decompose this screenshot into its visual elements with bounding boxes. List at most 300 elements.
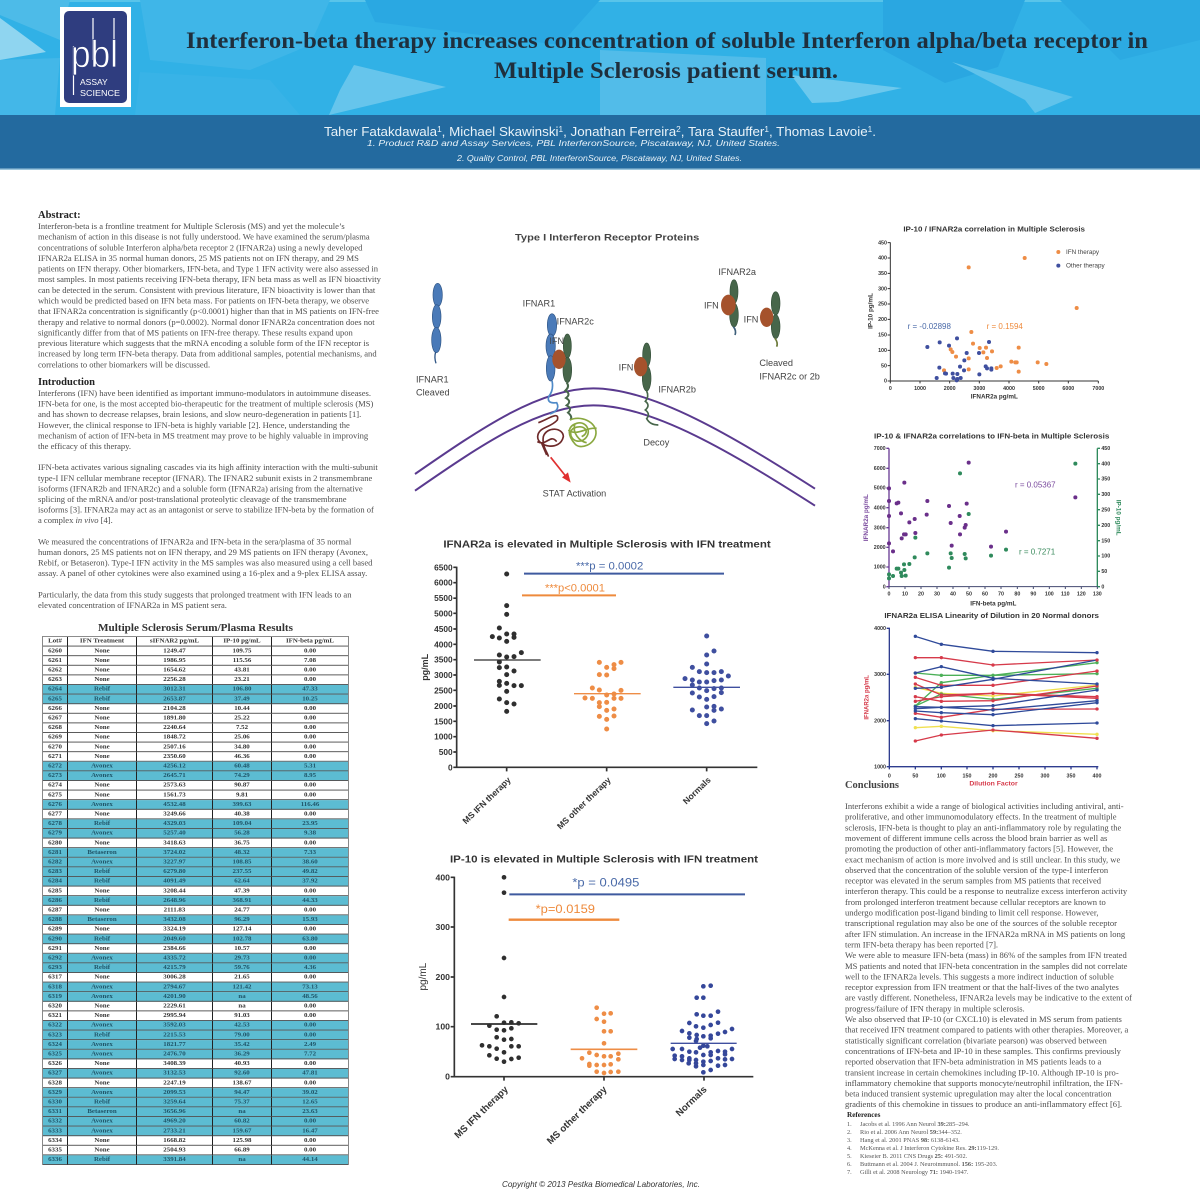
- results table: 8.95: [304, 772, 316, 779]
- references: 2.: [847, 1129, 852, 1136]
- results table: 6281: [48, 849, 62, 856]
- results table: 2111.83: [164, 906, 185, 913]
- results table: 6332: [48, 1118, 62, 1124]
- conclusions: undergo modification post-ligand binding to limit cell response. However,: [845, 908, 1098, 918]
- chart: correlations to IFN-beta scatter: IP-10 pg/mL: [1115, 500, 1122, 536]
- dots: IFNAR2a: [889, 463, 1075, 551]
- results table: 138.67: [233, 1079, 251, 1086]
- results table: 0.00: [304, 1079, 316, 1086]
- authors and affiliations: .: [872, 124, 876, 139]
- conclusions: promoting the production of other anti-inflammatory factors [5]. However, the: [845, 844, 1113, 854]
- results table: 3249.66: [163, 810, 186, 817]
- results table: na: [238, 1002, 246, 1009]
- results table: 1821.77: [163, 1041, 186, 1048]
- results table: 6320: [48, 1002, 62, 1009]
- results table: None: [94, 945, 110, 952]
- results table: Betaseron: [87, 916, 117, 923]
- results table: 3259.64: [163, 1098, 186, 1105]
- introduction: Rebif, or Betaseron). Type-I IFN activity in the MS samples was also measured using a cell based: [38, 558, 373, 568]
- results table: None: [94, 782, 110, 788]
- abstract: most samples. In most patients receiving IFN-beta therapy, IFN beta mass as well as IFN bioactivity: [38, 274, 382, 284]
- results table: 23.95: [302, 820, 318, 827]
- results table: 6267: [48, 714, 62, 721]
- results table: 6270: [48, 743, 62, 750]
- chart: correlations to IFN-beta scatter: 7000: [874, 446, 886, 452]
- abstract: [38, 210, 382, 369]
- results table: 6286: [48, 897, 62, 904]
- results table: 16.47: [302, 1127, 318, 1134]
- results table: 5.31: [304, 762, 316, 769]
- chart: correlations to IFN-beta scatter: 0: [1101, 584, 1104, 590]
- results table: Avonex: [91, 830, 113, 836]
- results table: 6277: [48, 810, 62, 817]
- results table: 6284: [48, 878, 62, 884]
- results table: 6326: [48, 1060, 62, 1067]
- title: Interferon-beta therapy increases concentration of soluble Interferon alpha/beta receptor in: [186, 28, 1148, 54]
- results table: 7.33: [304, 849, 316, 856]
- diagram labels: Cleaved: [416, 388, 450, 398]
- conclusions: term IFN-beta therapy has been reported [7].: [845, 939, 998, 949]
- references: Gilli et al. 2008 Neurology 71: 1940-1947.: [860, 1169, 969, 1176]
- abstract: previous literature which suggests that the mRNA encoding a soluble form of the IFN receptor is: [38, 338, 370, 348]
- results table: 108.85: [233, 858, 251, 865]
- conclusions: transcriptional regulation may also be one of the sources of the soluble receptor: [845, 918, 1117, 928]
- correlation labels: [908, 322, 1023, 331]
- logo: [60, 7, 131, 107]
- results table: None: [94, 906, 110, 913]
- chart: correlations to IFN-beta scatter: 250: [1101, 507, 1110, 513]
- introduction: human donors, 25 MS patients not on IFN therapy, and 29 MS patients on IFN therapy (Avonex,: [38, 547, 368, 557]
- results table: IP-10 pg/mL: [223, 638, 261, 644]
- chart: correlations to IFN-beta scatter: 110: [1061, 592, 1070, 598]
- chart: IP-10 dot plot: pg/mL: [418, 962, 429, 991]
- conclusions: transient increase in certain chemokines including IP-10. Although IP-10 is pro-: [845, 1067, 1119, 1077]
- results table: 6276: [48, 801, 62, 808]
- conclusions: observed that the concentration of the soluble version of the type-I interferon: [845, 865, 1109, 875]
- results table: 4.36: [304, 964, 316, 971]
- results table: 3408.39: [163, 1060, 186, 1067]
- results table: 2240.64: [163, 724, 186, 731]
- introduction: isoforms (IFNAR2b and IFNAR2c) and a soluble form (IFNAR2a) arising from the alternative: [38, 483, 363, 493]
- references: 3.: [847, 1137, 852, 1144]
- results table: 94.47: [234, 1089, 250, 1096]
- results table: 2104.28: [163, 705, 186, 712]
- chart: linearity of dilution: 2000: [874, 718, 886, 724]
- results table: 0.00: [304, 839, 316, 846]
- diagram labels: IFNAR2a: [718, 267, 757, 277]
- chart: IP-10 dot plot: 0: [445, 1072, 450, 1082]
- results table: 116.46: [301, 801, 319, 808]
- results table: 6269: [48, 734, 62, 740]
- results table: 37.49: [234, 695, 250, 702]
- chart: IFNAR2a dot plot: 4000: [434, 639, 453, 649]
- significance: p = 0.0002: ***p = 0.0002: [576, 560, 643, 572]
- results table: None: [94, 724, 110, 731]
- results table: 2229.61: [163, 1002, 186, 1009]
- results table: 73.13: [302, 983, 318, 990]
- results table: Avonex: [91, 762, 113, 769]
- dots: MS other therapy: [585, 662, 621, 729]
- authors and affiliations: , Tara Stauffer: [681, 124, 765, 139]
- chart: IP-10 dot plot: [418, 854, 759, 1147]
- results table: 36.29: [234, 1050, 250, 1057]
- results table: None: [94, 734, 110, 740]
- results table: None: [94, 705, 110, 712]
- results table: 10.57: [234, 945, 250, 952]
- significance: p=0.0159: *p=0.0159: [536, 903, 595, 916]
- results table: None: [94, 666, 110, 673]
- chart: IP-10 dot plot: IP-10 is elevated in Multiple Sclerosis with IFN treatment: [450, 854, 759, 865]
- results table: 0.00: [304, 1031, 316, 1038]
- results table: 109.75: [233, 647, 251, 654]
- chart: IFNAR2a dot plot: 5500: [434, 593, 453, 603]
- results table: None: [94, 1079, 110, 1086]
- abstract: correlations to other biomarkers will be discussed.: [38, 359, 210, 369]
- results table: 6319: [48, 993, 62, 1000]
- results table: 0.00: [304, 1060, 316, 1067]
- chart: IP-10 dot plot: MS other therapy: [545, 1084, 610, 1147]
- results table: 0.00: [304, 1022, 316, 1028]
- correlation labels: r = 0.7271: [1019, 547, 1056, 556]
- conclusions: beta induced transient systemic upregulation may alter the local concentration: [845, 1089, 1112, 1099]
- results table: None: [94, 1137, 110, 1144]
- results table: 66.89: [234, 1146, 250, 1153]
- conclusions: Interferons exhibit a wide a range of biological activities including antiviral, anti-: [845, 801, 1124, 811]
- introduction: IFN-beta activates various signaling cascades via its high affinity interaction with the multi-subunit: [38, 462, 378, 472]
- references: Buttmann et al. 2004 J. Neuroimmunol. 156: 195-203.: [860, 1161, 998, 1168]
- chart: IFNAR2a dot plot: 3000: [434, 670, 453, 680]
- results table: 6328: [48, 1079, 62, 1086]
- results table: 4091.49: [163, 878, 186, 884]
- results table: 3132.53: [163, 1070, 186, 1076]
- results table: 109.04: [233, 820, 251, 827]
- chart: IP-10 IFNAR2a correlation scatter: 0: [884, 379, 887, 385]
- conclusions: well to the IFNAR2a levels. This suggests a more indirect induction of soluble: [845, 971, 1114, 981]
- chart: correlations to IFN-beta scatter: [863, 431, 1122, 608]
- results table: 25.22: [234, 714, 250, 721]
- copyright: Copyright © 2013 Pestka Biomedical Laboratories, Inc.: [502, 1179, 700, 1189]
- chart: IP-10 IFNAR2a correlation scatter: 450: [878, 240, 887, 246]
- results table: Rebif: [94, 868, 110, 875]
- chart: IP-10 dot plot: 400: [436, 872, 450, 882]
- results table: None: [94, 810, 110, 817]
- results table: 6260: [48, 647, 62, 654]
- chart: IP-10 IFNAR2a correlation scatter: [868, 227, 1106, 401]
- chart: IP-10 IFNAR2a correlation scatter: IFNAR2a pg/mL: [971, 394, 1018, 401]
- introduction: elevated concentration of IFNAR2a in MS patient sera.: [38, 600, 227, 610]
- results table: 23.21: [234, 676, 250, 683]
- results table: 0.00: [304, 791, 316, 798]
- results table: Avonex: [91, 1118, 113, 1124]
- references: Jacobs et al. 1996 Ann Neurol 39:285–294.: [860, 1121, 970, 1128]
- chart: correlations to IFN-beta scatter: 40: [950, 592, 956, 598]
- chart: linearity of dilution: IFNAR2a pg/mL: [864, 675, 870, 720]
- results table: 34.80: [234, 743, 250, 750]
- results table: 12.65: [302, 1098, 318, 1105]
- chart: correlations to IFN-beta scatter: 0: [888, 592, 891, 598]
- abstract: IFNAR2a ELISA in 35 normal human donors, 25 MS patients not on IFN therapy, and 29 MS: [38, 253, 359, 263]
- results table: None: [94, 714, 110, 721]
- results table: 3208.44: [163, 887, 186, 894]
- title: Multiple Sclerosis patient serum.: [494, 58, 838, 84]
- results table: 2653.87: [163, 695, 186, 702]
- chart: correlations to IFN-beta scatter: IP-10 & IFNAR2a correlations to IFN-beta in Multiple Sclerosis: [874, 431, 1109, 440]
- results table: None: [94, 753, 110, 760]
- references: [847, 1111, 999, 1176]
- abstract: Interferon-beta is a frontline treatment for Multiple Sclerosis (MS) and yet the molecule’s: [38, 221, 345, 231]
- logo: pbl: [71, 34, 118, 76]
- chart: correlations to IFN-beta scatter: 70: [998, 592, 1004, 598]
- chart: IP-10 IFNAR2a correlation scatter: 150: [878, 333, 887, 339]
- results table: 6283: [48, 868, 62, 875]
- results table: 0.00: [304, 676, 316, 683]
- abstract: Abstract:: [38, 210, 81, 221]
- results table: 91.03: [234, 1012, 250, 1019]
- lines: navy donors: [915, 636, 1097, 726]
- results table: 40.93: [234, 1060, 250, 1067]
- results table: 10.44: [234, 705, 250, 712]
- chart: linearity of dilution: 250: [1015, 774, 1023, 780]
- results table: 0.00: [304, 945, 316, 952]
- results table: 0.00: [304, 1146, 316, 1153]
- results table: Rebif: [94, 695, 110, 702]
- diagram labels: [416, 267, 820, 499]
- results table: None: [94, 791, 110, 798]
- results table: 7.52: [236, 724, 248, 731]
- significance: p = 0.0495: *p = 0.0495: [572, 877, 639, 890]
- results table: 9.38: [304, 830, 316, 836]
- results table: Avonex: [91, 983, 113, 990]
- results table: None: [94, 974, 110, 980]
- results table: 0.00: [304, 753, 316, 760]
- results table: 5257.40: [163, 830, 186, 836]
- results table: 0.00: [304, 1137, 316, 1144]
- references: 7.: [847, 1169, 852, 1176]
- references: 5.: [847, 1153, 852, 1160]
- results table: 1249.47: [163, 647, 186, 654]
- results table: 6282: [48, 858, 62, 865]
- results table: 7.08: [304, 657, 316, 664]
- abstract: can be detected in the serum. Consistent with previous literature, IFN bioactivity is lower than that: [38, 285, 376, 295]
- results table: 2099.53: [163, 1089, 186, 1096]
- abstract: increased by long term IFN-beta therapy. Data from additional samples, potential mechanisms, and: [38, 349, 377, 359]
- results table: 29.73: [234, 954, 250, 961]
- correlation labels: [1015, 481, 1056, 556]
- results table: na: [238, 1156, 246, 1163]
- results table: 1654.62: [163, 666, 186, 673]
- results table: 6321: [48, 1012, 62, 1019]
- results table: 0.00: [304, 1012, 316, 1019]
- results table: 6330: [48, 1098, 62, 1105]
- results table: 1561.73: [163, 791, 186, 798]
- results table: 399.63: [233, 801, 251, 808]
- chart: correlations to IFN-beta scatter: 4000: [874, 505, 886, 511]
- results table: Betaseron: [87, 1108, 117, 1115]
- receptor: cleaved IFNAR2c or 2b: [760, 292, 780, 347]
- chart: correlations to IFN-beta scatter: 60: [982, 592, 988, 598]
- chart: correlations to IFN-beta scatter: 100: [1101, 554, 1110, 560]
- results table: 3656.96: [163, 1108, 186, 1115]
- results table: 1848.72: [163, 734, 186, 740]
- results table: 25.06: [234, 734, 250, 740]
- results table: 6262: [48, 666, 62, 673]
- results table: 2256.28: [163, 676, 186, 683]
- results table: 2247.19: [163, 1079, 186, 1086]
- authors and affiliations: [324, 124, 876, 163]
- conclusions: MS patients and noted that IFN-beta concentration in the samples did not correlate: [845, 961, 1128, 971]
- chart: correlations to IFN-beta scatter: 120: [1077, 592, 1086, 598]
- results table: 6331: [48, 1108, 62, 1115]
- header banner: [0, 0, 1200, 170]
- results table: 24.77: [234, 906, 250, 913]
- results table: 74.29: [234, 772, 250, 779]
- introduction: Introduction: [38, 377, 95, 388]
- results table: 0.00: [304, 810, 316, 817]
- chart: IP-10 IFNAR2a correlation scatter: 5000: [1033, 386, 1045, 392]
- results table: 9.81: [236, 791, 248, 798]
- results table: 3391.84: [163, 1156, 186, 1163]
- results table: None: [94, 926, 110, 932]
- chart: correlations to IFN-beta scatter: 200: [1101, 523, 1110, 529]
- references: Rio et al. 2006 Ann Neurol 59:344–352.: [860, 1129, 962, 1136]
- results table: 2794.67: [163, 983, 186, 990]
- results table: 2476.70: [163, 1050, 186, 1057]
- logo: SCIENCE: [80, 88, 120, 98]
- chart: correlations to IFN-beta scatter: 10: [902, 592, 908, 598]
- results table: 6322: [48, 1022, 62, 1028]
- results table: 49.82: [302, 868, 318, 875]
- references: Kieseier B. 2011 CNS Drugs 25: 491-502.: [860, 1153, 968, 1160]
- conclusions: interferon therapy. This could be a response to neutralize excess interferon activity: [845, 886, 1128, 896]
- authors and affiliations: 2: [676, 125, 681, 134]
- results table: IFN Treatment: [80, 638, 124, 644]
- results table: IFN-beta pg/mL: [286, 638, 334, 644]
- authors and affiliations: 1: [437, 125, 442, 134]
- results table: None: [94, 1146, 110, 1153]
- results table: None: [94, 657, 110, 664]
- results table: 6292: [48, 954, 62, 961]
- significance: p<0.0001: [522, 582, 616, 595]
- results table: 6275: [48, 791, 62, 798]
- results table: 40.38: [234, 810, 250, 817]
- results table: 6317: [48, 974, 62, 980]
- lines: green donors: [915, 663, 1097, 706]
- results table: 106.80: [233, 686, 251, 692]
- conclusions: are vastly different. Nonetheless, IFNAR2a levels may be indicative to the extent of: [845, 993, 1132, 1003]
- chart: IP-10 IFNAR2a correlation scatter: 1000: [914, 386, 926, 392]
- abstract: significantly differ from that of MS patients on IFN-free therapy. These results expand upon: [38, 327, 354, 337]
- conclusions: concentrations of IFN-beta and IP-10 in these samples. This confirms previously: [845, 1046, 1122, 1056]
- results table: 2648.96: [163, 897, 186, 904]
- diagram labels: IFNAR2c: [557, 317, 594, 327]
- results table: 6329: [48, 1089, 62, 1096]
- chart: linearity of dilution: 3000: [874, 672, 886, 678]
- legend: Other therapy: [1066, 263, 1106, 270]
- abstract: patients on IFN therapy. Other biomarkers, IFN-beta, and Type 1 IFN activity were also assessed in: [38, 264, 379, 274]
- dots: Normals: [673, 986, 732, 1072]
- chart: correlations to IFN-beta scatter: 100: [1045, 592, 1054, 598]
- chart: IP-10 IFNAR2a correlation scatter: 350: [878, 271, 887, 277]
- results table: 0.00: [304, 954, 316, 961]
- chart: IP-10 dot plot: 200: [436, 972, 450, 982]
- receptor: decoy IFNAR2b: [634, 343, 658, 425]
- results table: 6288: [48, 916, 62, 923]
- chart: correlations to IFN-beta scatter: 400: [1101, 461, 1110, 467]
- chart: IP-10 IFNAR2a correlation scatter: 4000: [1003, 386, 1015, 392]
- results table: 0.00: [304, 666, 316, 673]
- chart: linearity of dilution: 300: [1041, 774, 1049, 780]
- results table: Avonex: [91, 1050, 113, 1057]
- introduction: We measured the concentrations of IFNAR2a and IFN-beta in the sera/plasma of 35 normal: [38, 536, 352, 546]
- diagram labels: IFNAR2c or 2b: [759, 371, 820, 381]
- results table: 6290: [48, 935, 62, 942]
- introduction: assay. A panel of other cytokines were also examined using a 16-plex and a 9-plex ELISA assay.: [38, 568, 367, 578]
- logo: ASSAY: [80, 77, 108, 87]
- results table: 3012.31: [163, 686, 186, 692]
- chart: correlations to IFN-beta scatter: 5000: [874, 486, 886, 492]
- results table: na: [238, 1108, 246, 1115]
- results table: 2645.71: [163, 772, 186, 779]
- chart: linearity of dilution: [864, 613, 1101, 787]
- results table: 4256.12: [163, 762, 186, 769]
- results table: 36.75: [234, 839, 250, 846]
- legend: [1056, 249, 1106, 270]
- conclusions: inflammatory chemokine that supports monocyte/neutrophil infiltration, the IFN-: [845, 1078, 1123, 1088]
- chart: IP-10 IFNAR2a correlation scatter: 6000: [1062, 386, 1074, 392]
- chart: linearity of dilution: 200: [989, 774, 997, 780]
- results table: 2733.21: [163, 1127, 186, 1134]
- diagram labels: IFN: [549, 336, 564, 346]
- results table: 60.48: [234, 762, 250, 769]
- abstract: concentrations of soluble Interferon alpha/beta receptor 2 (IFNAR2a) using a newly developed: [38, 242, 363, 252]
- chart: linearity of dilution: 1000: [874, 764, 886, 770]
- results table: 6265: [48, 695, 62, 702]
- chart: correlations to IFN-beta scatter: 1000: [874, 565, 886, 571]
- results table: 44.33: [302, 897, 318, 904]
- results table: 43.81: [234, 666, 250, 673]
- results table: 4201.90: [163, 993, 186, 1000]
- results table: 6289: [48, 926, 62, 932]
- results table: 2573.63: [163, 782, 186, 788]
- results table: Rebif: [94, 897, 110, 904]
- results table: 0.00: [304, 724, 316, 731]
- chart: IFNAR2a dot plot: 6500: [434, 562, 453, 572]
- results table: 6318: [48, 983, 62, 990]
- introduction: However, the clinical response to IFN-beta is highly variable [2]. Hence, understanding the: [38, 420, 350, 430]
- introduction: a complex in vivo [4].: [38, 515, 113, 525]
- chart: correlations to IFN-beta scatter: 450: [1101, 446, 1110, 452]
- results table: 0.00: [304, 887, 316, 894]
- results table: Avonex: [91, 772, 113, 779]
- introduction: splicing of the mRNA and/or post-translational proteolytic cleavage of the transmembrane: [38, 494, 347, 504]
- conclusions: reported observation that IFN-beta administration in MS patients leads to a: [845, 1057, 1102, 1067]
- chart: IP-10 IFNAR2a correlation scatter: 400: [878, 256, 887, 262]
- results table: 6261: [48, 657, 62, 664]
- results table: 21.65: [234, 974, 250, 980]
- results table: Avonex: [91, 858, 113, 865]
- authors and affiliations: , Michael Skawinski: [442, 124, 559, 139]
- authors and affiliations: , Jonathan Ferreira: [563, 124, 677, 139]
- chart: IFNAR2a dot plot: 2000: [434, 701, 453, 711]
- results table: 6271: [48, 753, 62, 760]
- table heading: Multiple Sclerosis Serum/Plasma Results: [98, 623, 293, 634]
- results table: 2384.66: [163, 945, 186, 952]
- results table: 6272: [48, 762, 62, 769]
- dots: MS IFN therapy: [482, 877, 519, 1062]
- results table: Rebif: [94, 878, 110, 884]
- results table: 1668.82: [163, 1137, 186, 1144]
- dots: other therapy: [927, 338, 991, 380]
